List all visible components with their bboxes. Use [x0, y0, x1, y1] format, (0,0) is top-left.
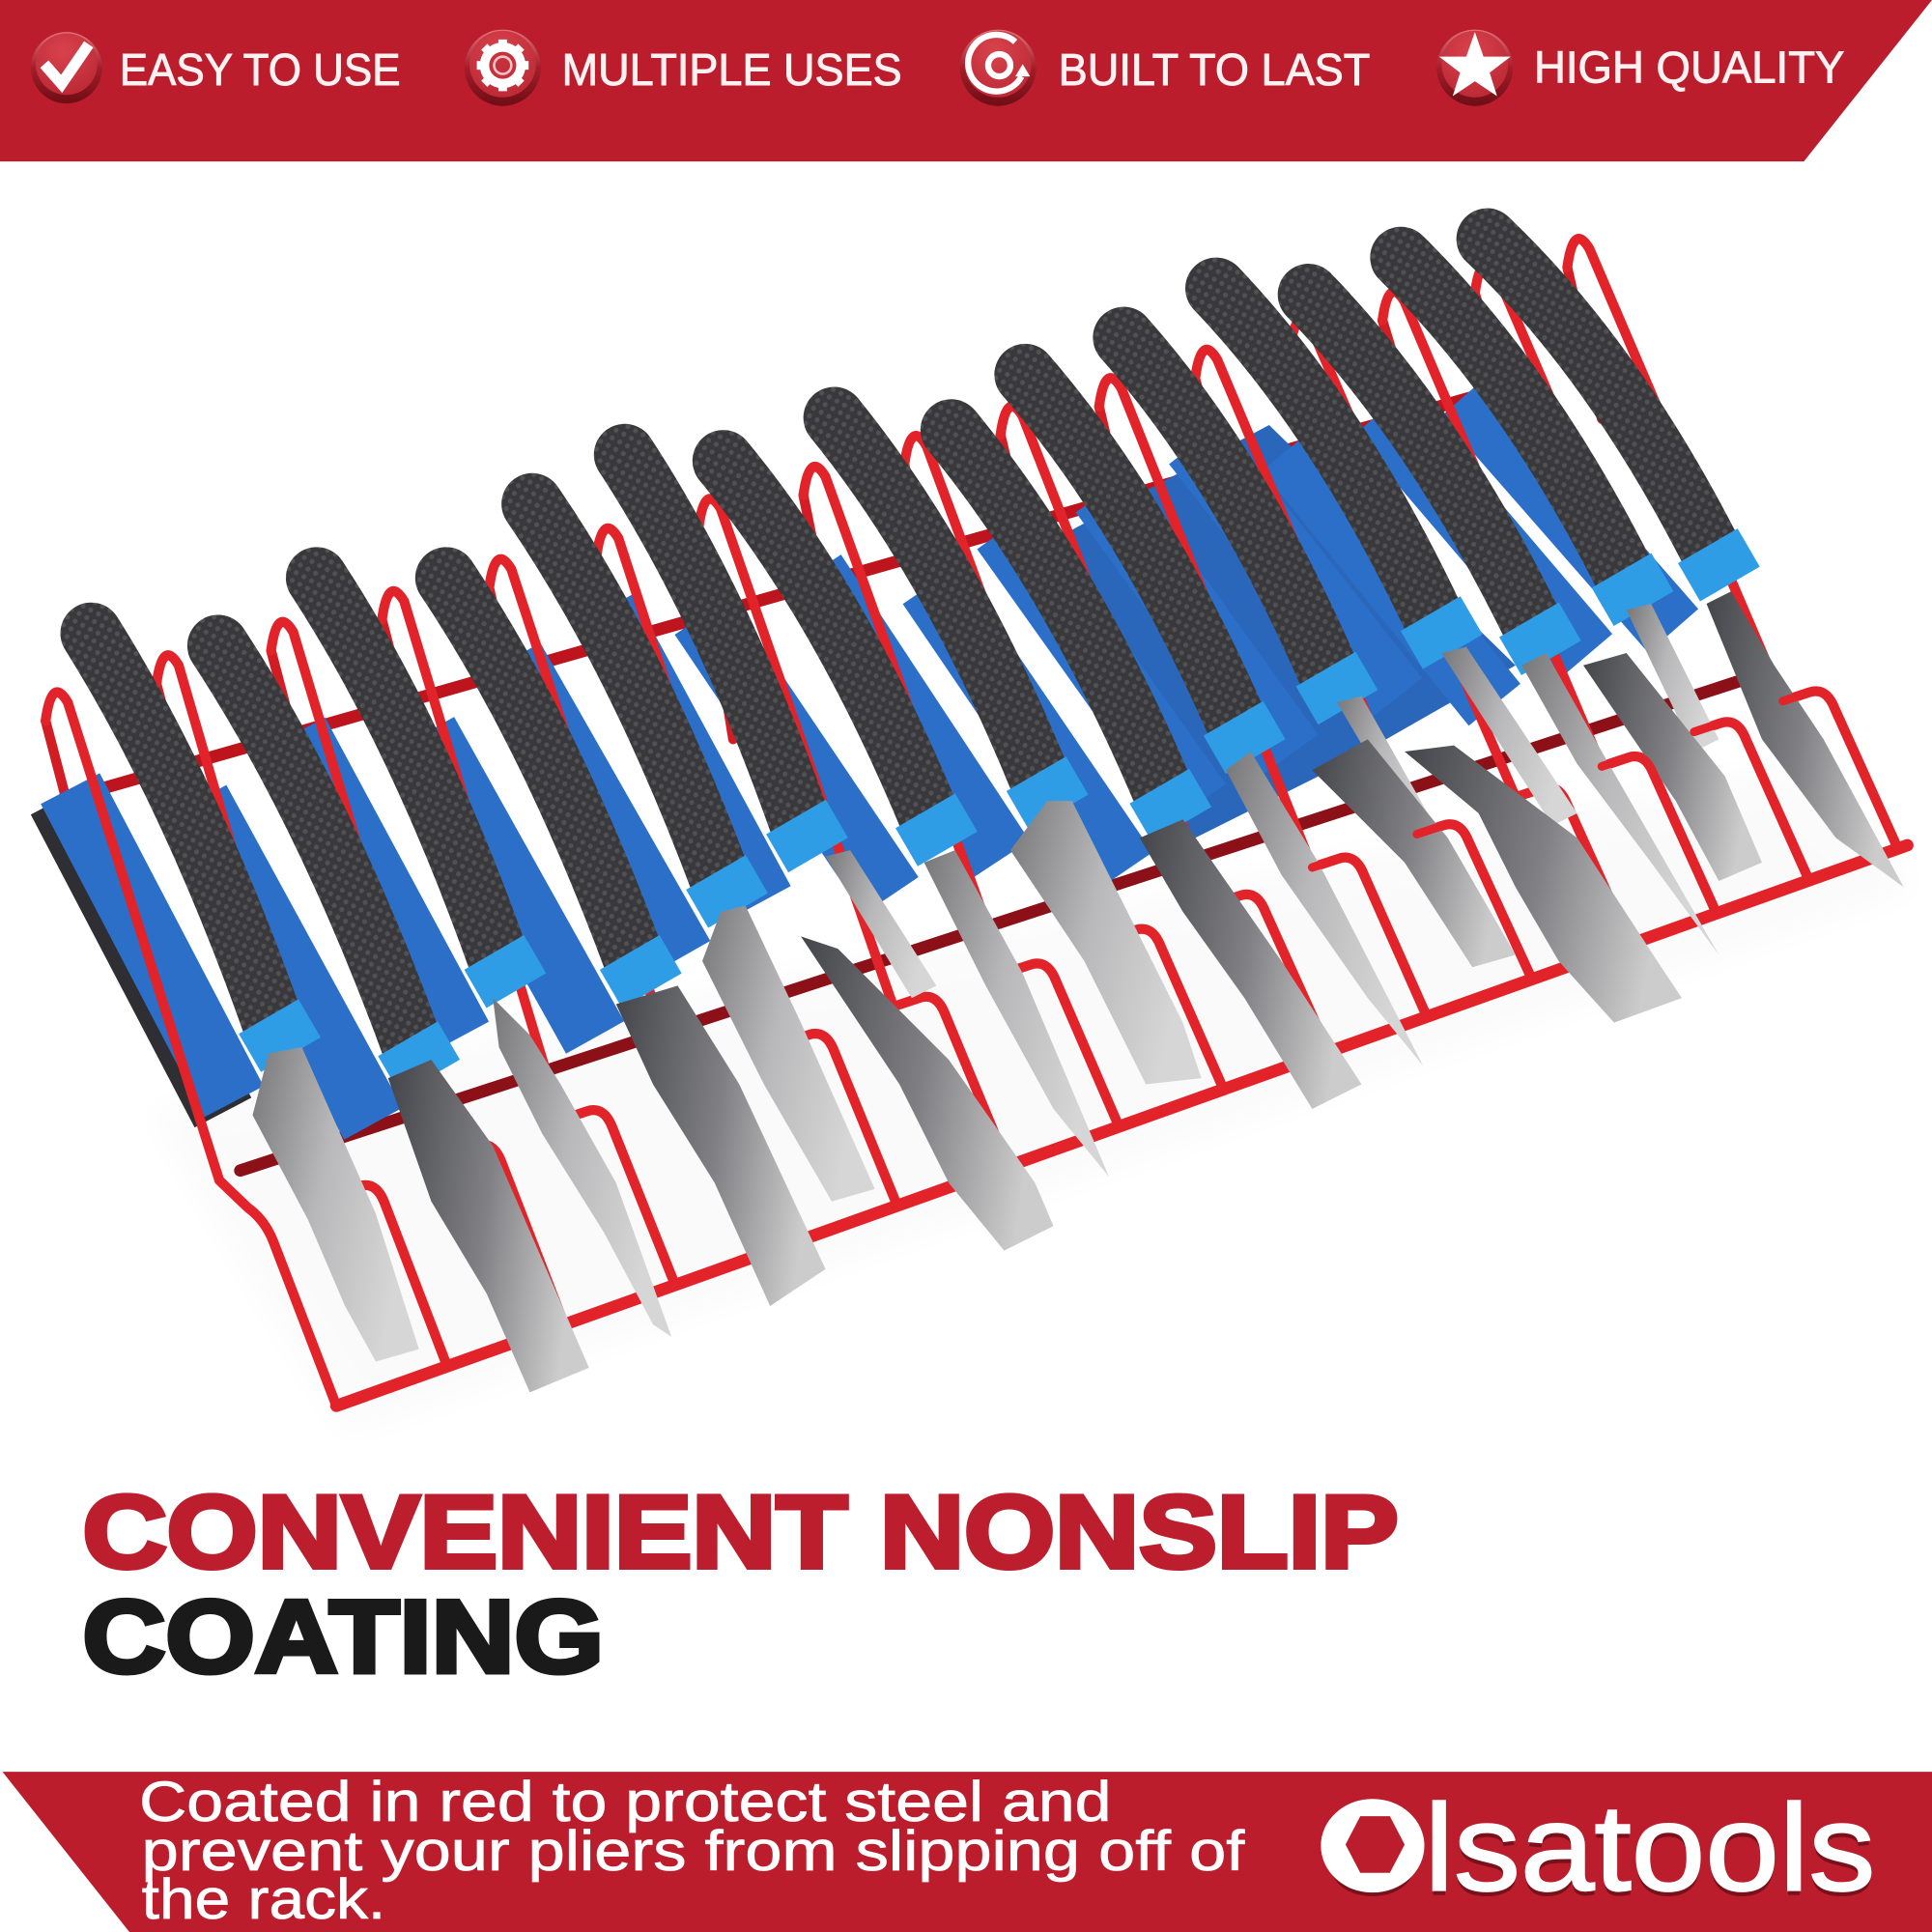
description text: the rack.: [142, 1868, 385, 1931]
pliers: textured black grips: [91, 239, 1713, 1047]
logo: olsatools: Olsatools: [1321, 1785, 1875, 1922]
soft ground shadow: [148, 764, 1922, 1435]
rack: rear legs: [45, 268, 1602, 899]
pliers: dark lower handle edge: [59, 800, 223, 1113]
icon: star badge: [1436, 30, 1513, 106]
pliers: blue lower handles: [71, 394, 1673, 1123]
description text: Coated in red to protect steel and: [139, 1771, 1112, 1833]
rack: front loops over jaws: [1312, 691, 1897, 1016]
header banner: [0, 0, 1932, 161]
product illustration: pliers rack: [45, 239, 1922, 1435]
rack: front wires and loops: [45, 239, 1907, 1406]
icon: gear badge: [465, 30, 541, 106]
headline line: coating: COATING: [82, 1578, 604, 1694]
headline: [82, 1473, 1399, 1694]
description text: prevent your pliers from slipping off of: [142, 1820, 1245, 1883]
pliers: light blue collars: [269, 546, 1730, 1077]
label: multiple uses: MULTIPLE USES: [562, 44, 902, 95]
pliers: steel jaws: [252, 591, 1904, 1392]
icon: circular arrow gear badge: [960, 30, 1037, 106]
footer banner: [3, 1771, 1932, 1932]
label: easy to use: EASY TO USE: [120, 44, 401, 95]
label: high quality: HIGH QUALITY: [1534, 42, 1844, 92]
headline line: convenient nonslip: CONVENIENT NONSLIP: [82, 1473, 1399, 1589]
pliers: blue backing behind right handles: [1072, 425, 1516, 850]
rack: rear and middle rails: [80, 392, 1749, 1171]
description text: [139, 1771, 1245, 1931]
label: built to last: BUILT TO LAST: [1059, 44, 1370, 95]
logo: olsatools: Olsatools: [1321, 1780, 1875, 1918]
icon: check mark badge: [31, 32, 102, 103]
